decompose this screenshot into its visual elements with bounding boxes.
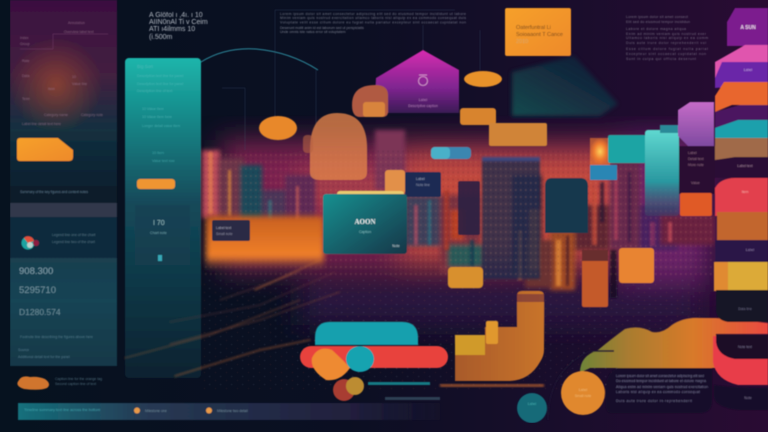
bottom bar: Milestone one [145, 409, 167, 413]
top right paragraph [626, 15, 708, 61]
dark text panel: Value [691, 181, 700, 185]
top paragraph: Minim veniam quis nostrud exercitation ullamco laboris nisi aliquip ex ea commodo consequat duis [280, 16, 466, 20]
orange button [137, 179, 175, 189]
orange ellipse right [464, 71, 502, 87]
teal circle [517, 393, 547, 423]
blue tile [590, 165, 617, 180]
right stacked column: Label text [737, 164, 753, 168]
small annotations: Category name [44, 113, 68, 117]
red circle [333, 379, 355, 401]
orange folder stack [455, 291, 544, 381]
small annotations: Value line [72, 82, 87, 86]
teal layer [715, 120, 768, 138]
top orange card: 2010 [516, 39, 528, 45]
teal tall card: 10 Item [152, 151, 164, 155]
orange cloud tag: Caption line for the orange tag [55, 377, 102, 381]
top right paragraph: Sunt in culpa qui officia deserunt [626, 57, 696, 61]
small annotations: Data [22, 74, 29, 78]
city window texture [202, 150, 714, 275]
orange ellipse left [259, 116, 297, 140]
icon block: magenta house: Label [419, 98, 427, 102]
title text: (i.500m [149, 34, 173, 41]
panel: lower left with figures: Legend line one of the chart [52, 233, 95, 237]
icon: ring [418, 75, 428, 86]
teal tall card: Value text row [152, 159, 175, 163]
top right paragraph: Ullamco laboris nisi aliquip ex ea comm [626, 36, 708, 40]
top right paragraph: Labore et dolore magna aliqua [626, 27, 686, 31]
dark teal building [545, 178, 588, 233]
top right paragraph: Duis aute irure dolor reprehenderit vol [626, 41, 706, 45]
small annotations: Label line detail text here [22, 122, 61, 126]
dark top tier [716, 335, 768, 359]
dark band with caption [10, 186, 117, 203]
large orange bubble [303, 113, 367, 180]
faded strip [385, 397, 440, 400]
teal tall card: 10 Value item [142, 107, 164, 111]
panel: lower left with figures: Additional detail text for the panel [18, 355, 70, 359]
dark text panel bottom: Laboris nisi aliquip ex ea commodo consequat [616, 390, 700, 394]
orange cloud tag: Second caption line of text [55, 382, 96, 386]
dark text panel: Label [688, 151, 697, 155]
teal tall card: 10 Value item here [142, 115, 172, 119]
bottom bar: Milestone two detail [217, 409, 248, 413]
right stacked column: Label [744, 68, 752, 72]
orange brown layer [717, 212, 768, 240]
orange square tile [619, 248, 654, 283]
top right paragraph: Lorem ipsum dolor sit amet consect [626, 15, 688, 19]
top paragraph: Deserunt mollit anim id est laborum sed ut perspiciatis [280, 26, 364, 30]
orange layer [715, 82, 768, 112]
orange tag [17, 138, 73, 161]
inner chart box [135, 205, 190, 265]
right stacked column: Data line [738, 307, 752, 311]
orange glow panel [206, 216, 324, 270]
title text: AIIN0nAl Ti v Ceim [149, 19, 208, 26]
red tier [713, 336, 768, 385]
guide lines [222, 10, 480, 150]
top paragraph: Lorem ipsum dolor sit amet consectetur adipiscing elit sed do eiusmod tempor incididunt ut labore [280, 12, 466, 16]
top paragraph: Voluptate velit esse cillum dolore eu fugiat nulla pariatur excepteur sint occaecat cupidatat non [280, 20, 466, 24]
small annotations: 10 [72, 75, 76, 79]
night road with light trails [125, 260, 340, 376]
icon block: magenta house: Descriptive caption [408, 104, 438, 108]
purple top [727, 8, 768, 46]
dark text panel: More note [688, 163, 704, 167]
orange cloud tag [17, 376, 102, 390]
bottom bar [18, 403, 440, 420]
dark text panel bottom [606, 368, 712, 413]
navy window texture [482, 162, 540, 277]
small annotations: Item [48, 87, 55, 91]
top right paragraph: Enim ad minim veniam quis nostrud exer [626, 32, 707, 36]
teal shaded triangle [512, 56, 618, 116]
top right paragraph: Excepteur sint occaecat cupidatat non [626, 52, 706, 56]
teal tall card: Description line of text [137, 89, 172, 93]
distant strip [440, 384, 544, 387]
orange circle: Label [579, 388, 587, 392]
center teal card [323, 191, 407, 254]
narrow towers [208, 152, 672, 298]
teal tall card: Longer detail value item [142, 124, 180, 128]
dark label card [212, 220, 250, 241]
center teal card: Caption [359, 230, 371, 234]
title text: ATI ı4ilmms 10 [149, 26, 195, 33]
teal tall card: Big Sort [137, 64, 154, 69]
right stacked column: Item [742, 190, 748, 194]
teal strip [368, 382, 430, 385]
orange glow [10, 37, 102, 133]
yellow circle [346, 377, 364, 395]
small annotations: Rate [22, 59, 29, 63]
night lights texture [203, 278, 703, 390]
top paragraph: Unde omnis iste natus error sit voluptatem [280, 30, 346, 34]
navy building card [482, 157, 540, 279]
city glow backdrop [220, 135, 710, 325]
teal tall card: Chart note [150, 231, 167, 235]
small annotations: Index [20, 36, 29, 40]
lilac block [678, 102, 714, 146]
orange labels [460, 108, 547, 146]
top right paragraph: Esse cillum dolore fugiat nulla pariat [626, 47, 708, 51]
figures: 908.300 [19, 266, 53, 277]
panel: lower left with figures: Source [18, 348, 29, 352]
small annotations: Overview label text [64, 30, 94, 34]
orange circle [561, 371, 605, 415]
dark navy card [405, 172, 441, 197]
yellow-orange tag [448, 267, 483, 288]
glowing tile [590, 138, 610, 165]
bottom bar: Timeline summary text line across the bottom [24, 408, 100, 412]
small orange tile [385, 170, 405, 194]
dark text panel [679, 146, 715, 194]
teal circle: Label [528, 402, 536, 406]
small annotations: Group [20, 42, 30, 46]
figures [19, 266, 61, 317]
black layer [716, 290, 768, 322]
orange circle: Small note [575, 394, 591, 398]
icon block: magenta house [374, 50, 459, 113]
wave shape [580, 318, 768, 372]
panel: lower left with figures [10, 203, 117, 366]
dark navy card: Note line [416, 183, 430, 187]
teal tall card: I 70 [153, 220, 165, 227]
panel: lower left with figures: Footnote line describing the figures above here [20, 335, 93, 339]
orange building [582, 250, 608, 307]
dark text panel bottom: Aliqua enim ad minim veniam quis nostrud exercitation [616, 385, 708, 389]
small tower card [458, 181, 480, 235]
dark label card: Small note [216, 232, 233, 236]
right stacked column: Label [746, 248, 754, 252]
teal tall card: Description text line for panel [137, 74, 184, 78]
dark text panel bottom: Duis aute irure dolor in reprehenderit [616, 399, 692, 403]
dark text panel: Detail text [688, 157, 704, 161]
brown layer [715, 138, 768, 160]
dark text panel bottom: Do eiusmod tempor incididunt ut labore et dolore magna [616, 379, 706, 383]
orange block [680, 193, 712, 216]
dark layer [715, 157, 768, 178]
connector arc [201, 49, 318, 70]
dark label card: Label text [216, 226, 231, 230]
purple layer [715, 62, 768, 88]
right stacked column: A SUN [740, 25, 756, 31]
dark purple layer [715, 105, 768, 128]
marker dots [134, 408, 140, 414]
panel: upper left [10, 0, 117, 203]
bottom dark tier [714, 385, 768, 410]
small city blocks right [590, 125, 679, 216]
top paragraph [280, 12, 466, 34]
title text: A Glöfol ı ,4ı. ı 10 [149, 12, 203, 19]
right stacked column [713, 8, 768, 410]
orange blob [312, 349, 350, 380]
dark text panel bottom: Lorem ipsum dolor sit amet consectetur adipiscing elit sed [616, 374, 704, 378]
right stacked column: Note text [738, 345, 752, 349]
title text [149, 12, 208, 41]
top orange card: Soioaaont T Cance [516, 32, 563, 38]
small annotations: Term [22, 97, 30, 101]
small annotations [20, 21, 103, 126]
dark navy card: Label [416, 177, 425, 181]
small annotations: Annotation [68, 21, 85, 25]
overlapping pills [300, 322, 448, 401]
panel: lower left with figures: Legend line two of the chart [52, 240, 95, 244]
teal circle [346, 346, 374, 372]
teal tall card [125, 58, 201, 378]
curve line [548, 351, 614, 420]
right stacked column: Note [744, 396, 752, 400]
icon: pie chart [22, 236, 39, 250]
red pill [300, 346, 448, 368]
light teal tile [645, 130, 679, 216]
center teal card: AOON [354, 218, 376, 226]
top orange card [505, 8, 571, 56]
teal pill [315, 322, 418, 345]
yellow layer [714, 262, 768, 291]
small annotations: Category note [81, 113, 103, 117]
figures: 5295710 [19, 285, 56, 296]
navy layer [715, 240, 768, 263]
dark band with caption: Summary of the key figures and context notes [20, 190, 88, 194]
top orange card: Oaterfuntral Li [516, 25, 551, 31]
teal tile [608, 135, 646, 163]
top right paragraph: Elit sed do eiusmod tempor incididun [626, 20, 690, 24]
red layer [715, 178, 768, 216]
teal tall card: Description text line for panel [137, 82, 184, 86]
figures: D1280.574 [19, 307, 61, 317]
pink layer [715, 45, 768, 78]
city skyline [202, 130, 715, 290]
center teal card: Note [392, 244, 400, 248]
blue pill [431, 147, 471, 159]
orange rounded blob [352, 85, 388, 117]
